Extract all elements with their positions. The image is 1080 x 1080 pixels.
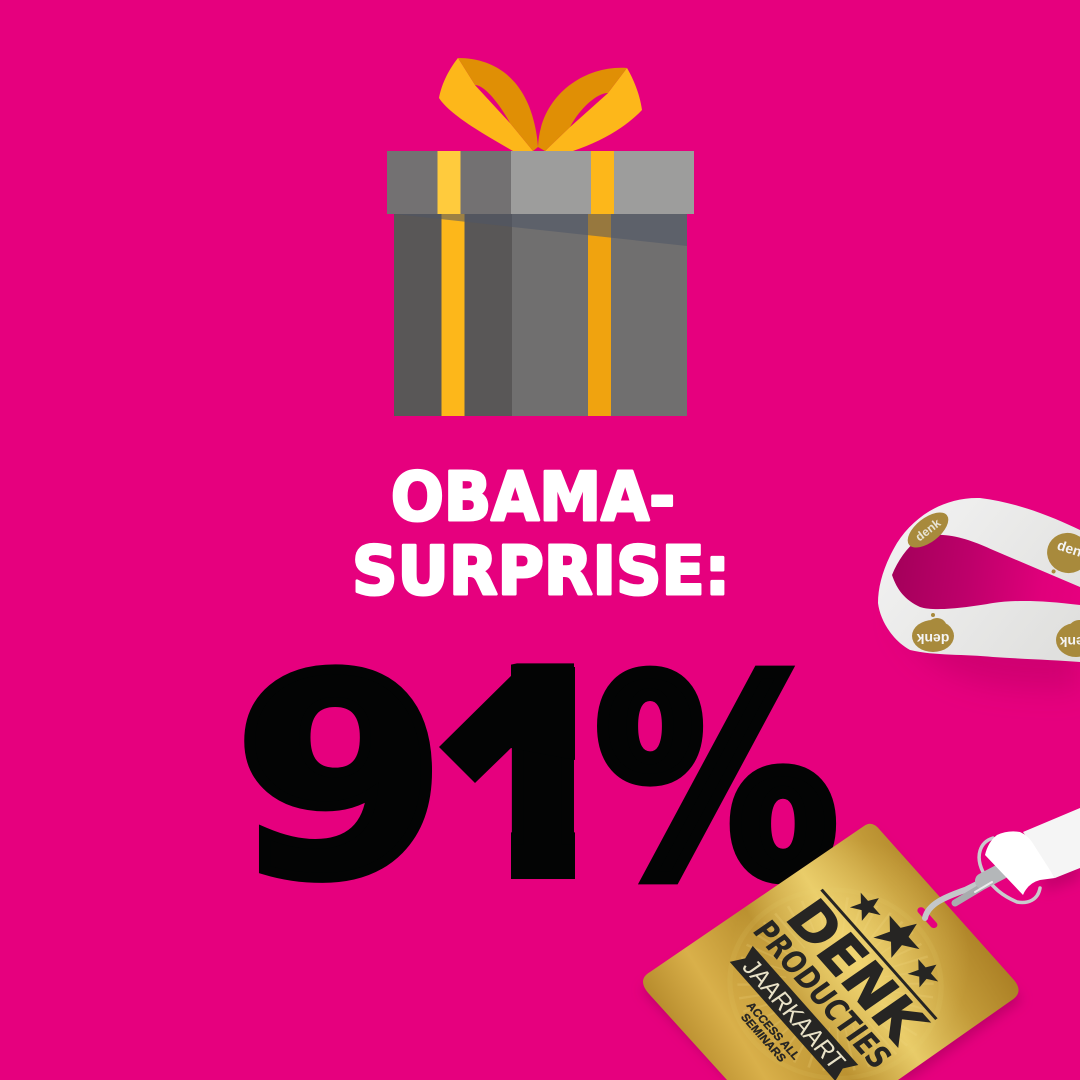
lanyard logo bottom right <box>1056 620 1080 657</box>
heading: OBAMA- <box>391 458 675 536</box>
banner <box>730 946 858 1080</box>
lanyard slot <box>917 907 938 928</box>
badge print <box>730 888 938 1080</box>
strap end <box>1023 808 1080 892</box>
gift icon <box>387 58 694 416</box>
lanyard logo top left: denk <box>913 516 944 544</box>
heading: SURPRISE: <box>352 532 730 610</box>
box body <box>394 214 687 416</box>
big number 91%: 1 <box>438 613 634 942</box>
JAARKAART: JAARKAART <box>736 955 851 1074</box>
lanyard logo bottom left <box>912 613 954 652</box>
sunburst rays <box>738 906 934 1070</box>
big number 91%: 9 <box>234 619 446 940</box>
DENK wordmark: DENK <box>772 889 940 1055</box>
big number 91% <box>244 663 836 884</box>
bow <box>439 58 642 151</box>
access text: ACCESS ALL <box>743 1001 802 1062</box>
strap fold <box>985 831 1055 895</box>
lanyard logo bottom left: denk <box>916 631 949 647</box>
badge glow <box>754 870 947 1054</box>
infographic canvas <box>244 58 1080 1080</box>
heading <box>352 458 730 610</box>
badge card <box>643 824 1019 1080</box>
lanyard logo top right <box>1041 527 1080 583</box>
gold badge with strap <box>642 808 1080 1080</box>
badge shadow <box>642 986 1022 1080</box>
access text: SEMINARS <box>738 1012 788 1065</box>
stars <box>850 892 938 988</box>
lanyard loop <box>878 498 1080 690</box>
seal ring <box>687 852 984 1080</box>
lanyard logo top left <box>902 506 954 554</box>
divider line <box>820 889 938 1020</box>
big number 91%: % <box>595 623 838 939</box>
metal ring and clasp <box>925 838 1040 918</box>
box lid <box>387 151 694 214</box>
